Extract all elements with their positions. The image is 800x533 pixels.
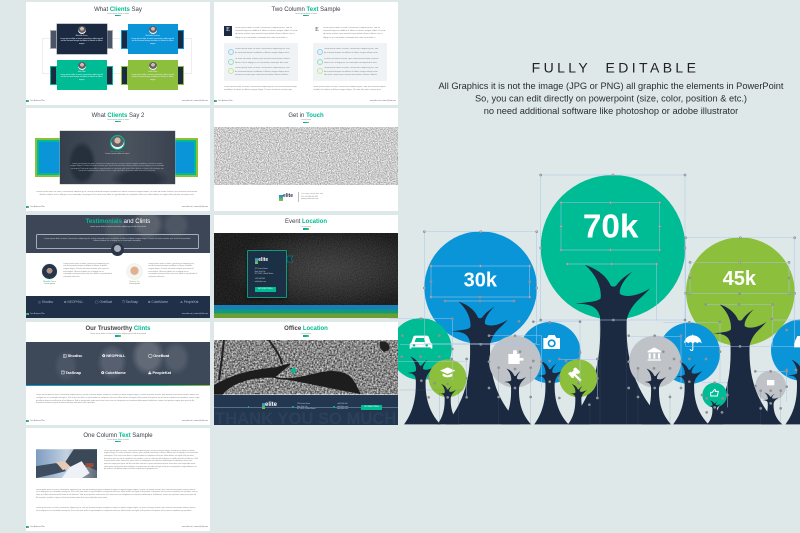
info band: 123 Lorem Street	[297, 403, 310, 405]
location callout: 123 Lorem Street	[255, 268, 268, 270]
description text: So, you can edit directly on powerpoint (size, color, position & etc.)	[475, 94, 747, 104]
tree trunks: large	[446, 265, 778, 424]
panel: office location: Lorem ipsum	[301, 333, 311, 335]
drop cap light: E	[315, 27, 319, 33]
footer	[26, 312, 208, 315]
info band: NY 10001, United States	[297, 408, 316, 410]
tree: blue camera	[519, 322, 581, 424]
title: Testimonials and Clints	[86, 219, 150, 225]
selection handles	[402, 175, 796, 412]
panel: event location: Lorem ipsum	[301, 226, 311, 228]
testimonial text left: Lorem ipsum dolor sit amet, consectetur adipiscing elit, sed do eiusmod tempor incididunt ut labore et dolore magna aliqua. Ut enim ad minim veniam, quis nostrud exercitation. Ullamco laboris nisi ut aliquip ex ea commodo consequat duis aute irure dolor in reprehenderit voluptate velit esse.	[63, 263, 112, 278]
card: blue	[128, 24, 178, 54]
info band: elite	[265, 402, 277, 408]
location callout: New York City	[255, 270, 265, 272]
description text: no need additional software like photoshop or adobe illustrator	[484, 106, 738, 116]
footer	[214, 100, 396, 102]
title: Get in Touch	[288, 113, 324, 119]
info band: www.elite.com	[337, 408, 348, 410]
portrait	[110, 135, 125, 150]
tree: lime gavel	[559, 359, 597, 424]
card: lime: Laura Rose	[148, 71, 157, 73]
description text: All Graphics it is not the image (JPG or PNG) all graphic the elements in PowerPoint	[439, 81, 784, 91]
footer	[26, 526, 208, 528]
client logo band: ✿ NEOPHILL	[64, 300, 83, 304]
heading: fully editable: FULLY EDITABLE	[532, 60, 699, 76]
card: dark: Lorem ipsum dolor sit amet consectetur adipiscing elit sed do eiusmod tempor incididunt ut labore et dolore magna	[60, 38, 103, 45]
logos photo panel: ✿ NEOPHILL	[102, 354, 125, 358]
tree: 30k: 30k	[464, 270, 498, 292]
title: Two Column Text Sample	[272, 7, 340, 13]
tree: grey puzzle	[489, 336, 541, 424]
card: lime: Lorem ipsum dolor sit amet consectetur adipiscing elit sed do eiusmod tempor incididunt ut labore et dolore magna	[131, 74, 174, 81]
card: dark: Michelle Grace	[76, 35, 88, 37]
title: One Column Text Sample	[83, 433, 153, 439]
logos photo panel: ◫ Shodisc	[63, 354, 82, 358]
drop cap dark	[224, 26, 232, 36]
footer: www.elite.com | contact@elite.com	[182, 100, 208, 102]
panel: one column text sample: Lorem ipsum dolor sit amet	[107, 438, 129, 440]
contact text: Tel: +00 000 000 000	[301, 196, 318, 198]
panel: two column text sample: Lorem ipsum dolor sit amet	[295, 12, 317, 14]
drop cap dark: E	[226, 27, 230, 33]
person left	[42, 264, 58, 285]
client logo band	[26, 296, 210, 318]
info band: +000 000 000	[337, 403, 347, 405]
location pin	[290, 368, 296, 373]
badge	[111, 243, 124, 256]
person right	[126, 264, 142, 285]
logos photo panel: ✿ CubeMome	[101, 371, 126, 375]
tree: lime graduation cap	[429, 359, 467, 424]
colour bands	[214, 305, 398, 318]
list panel right	[313, 43, 387, 81]
title: Event Location	[285, 219, 327, 225]
tree: green car	[390, 318, 452, 424]
photo quote panel: Lorem ipsum dolor sit amet, consectetur adipiscing elit, sed do eiusmod tempor incididunt ut labore et dolore magna aliqua. Ut enim ad minim veniam, quis nostrud exercitation ullamco laboris nisi ut aliquip ex ea commodo consequat. Duis aute irure dolor in reprehenderit in voluptate velit esse cillum dolore eu fugiat nulla pariatur sint occaecat cupidatat non proident sunt in culpa qui officia deserunt mollit anim id est laborum.	[70, 163, 164, 172]
panel: what clients say 2	[26, 108, 210, 211]
testimonial text right: Lorem ipsum dolor sit amet, consectetur adipiscing elit, sed do eiusmod tempor incididunt ut labore et dolore magna aliqua. Ut enim ad minim veniam, quis nostrud exercitation. Ullamco laboris nisi ut aliquip ex ea commodo consequat duis aute irure dolor in reprehenderit voluptate velit esse.	[148, 263, 197, 278]
body text: Lorem ipsum dolor sit amet, consectetur adipiscing elit, sed do eiusmod tempor incididunt ut labore et dolore magna aliqua. Ut enim ad minim veniam, quis nostrud exercitation ullamco laboris nisi ut aliquip ex ea commodo consequat. Duis aute irure dolor in reprehenderit in voluptate velit esse cillum dolore eu fugiat nulla pariatur. Excepteur sint occaecat cupidatat non proident, sunt in culpa qui officia deserunt mollit anim id est laborum. Sed ut perspiciatis unde omnis iste natus error sit voluptatem accusantium doloremque laudantium, totam rem aperiam eaque ipsa quae ab illo inventore veritatis et quasi architecto beatae vitae dicta sunt explicabo.	[36, 394, 200, 404]
contact text	[301, 193, 323, 200]
full-width text two: Lorem ipsum dolor sit amet, consectetur adipiscing elit, sed do eiusmod tempor incididunt ut labore et dolore magna aliqua. Ut enim ad minim veniam, quis nostrud exercitation ullamco laboris nisi ut aliquip ex ea commodo consequat. Duis aute irure dolor in reprehenderit in voluptate velit esse cillum dolore eu fugiat nulla pariatur. Excepteur sint occaecat cupidatat non proident.	[36, 507, 195, 512]
card: green	[57, 60, 107, 90]
map	[214, 127, 398, 185]
tree: blue umbrella	[659, 323, 720, 424]
title: Office Location	[284, 326, 328, 332]
client logo band: ❐ TaxSnap	[122, 300, 138, 304]
location callout: +000 000 000	[255, 278, 265, 280]
tree: 45k	[686, 237, 795, 346]
title: What Clients Say	[94, 7, 142, 13]
card side tabs	[50, 30, 184, 85]
panel: what clients say 2: Lorem ipsum dolor sit amet	[107, 118, 129, 120]
description text	[439, 81, 784, 116]
side text: Lorem ipsum dolor sit amet, consectetur adipiscing elit, sed do eiusmod tempor incididunt ut labore et dolore magna aliqua. Ut enim ad minim veniam, quis nostrud exercitation ullamco laboris nisi ut aliquip ex ea commodo consequat. Duis aute irure dolor in reprehenderit in voluptate velit esse cillum dolore eu fugiat nulla pariatur. Excepteur sint occaecat cupidatat non proident, sunt in culpa qui officia deserunt mollit anim id est laborum. Sed ut perspiciatis unde omnis iste natus error sit voluptatem accusantium doloremque laudantium, totam rem aperiam eaque ipsa quae ab illo inventore veritatis et quasi architecto beatae vitae dicta sunt explicabo nemo enim ipsam voluptatem quia voluptas sit aspernatur aut odit aut fugit sed quia consequuntur magni dolores eos qui ratione voluptatem sequi nesciunt neque porro quisquam est.	[104, 450, 198, 470]
panel: testimonials and clients	[26, 215, 210, 318]
handshake photo	[36, 449, 97, 478]
client logo band: ◯ OneBoat	[95, 300, 112, 304]
footer: www.elite.com | contact@elite.com	[182, 313, 208, 315]
person left: Lorem ipsum	[44, 283, 55, 285]
title: What Clients Say 2	[92, 113, 144, 119]
client logo band: ⟁ PeopleKat	[180, 300, 198, 304]
location callout: NY 10001, United States	[255, 273, 273, 275]
location callout	[247, 250, 287, 298]
contact text: 123 Lorem Street New York	[301, 193, 323, 195]
panel: what clients say: Lorem ipsum dolor sit amet	[107, 12, 129, 14]
footer: Your Business Plan	[30, 313, 45, 315]
contact text: www.yourdomain.com	[301, 198, 319, 200]
logos photo panel	[26, 342, 210, 386]
tree: grey bank	[629, 336, 681, 424]
quote box	[36, 234, 199, 249]
footer: Your Business Plan	[30, 420, 45, 422]
photo quote panel: Michelle Grace	[111, 151, 124, 153]
info band: New York City	[297, 406, 308, 408]
coloured frame	[35, 138, 198, 177]
quote box: Lorem ipsum dolor sit amet, consectetur adipiscing elit, sed do eiusmod tempor incididunt ut labore et dolore magna aliqua. Ut enim ad minim veniam, quis nostrud exercitation ullamco laboris nisi ut aliquip ex ea commodo consequat.	[44, 238, 191, 242]
dark map	[214, 233, 398, 305]
card: dark	[57, 24, 107, 54]
tree: 30k	[424, 231, 537, 344]
tree: 70k	[541, 175, 685, 320]
person right: Lorem ipsum	[129, 283, 140, 285]
info band: GET DIRECTIONS ▸	[364, 407, 379, 408]
card: blue: Lorem ipsum dolor sit amet consectetur adipiscing elit sed do eiusmod tempor incididunt ut labore et dolore magna	[131, 38, 174, 45]
panel: event location	[214, 215, 398, 318]
tree: small green thumb	[702, 383, 727, 424]
footer: www.elite.com | contact@elite.com	[182, 206, 208, 208]
person left: Michelle Grace	[43, 280, 56, 282]
tree: small grey	[755, 371, 786, 424]
panel: our trustworthy clients: Lorem ipsum dolor sit amet consectetur adipiscing elit sed do eiusmod	[90, 333, 146, 335]
tree: blue right	[771, 319, 800, 424]
client logo band: ◫ Shodisc	[38, 300, 53, 304]
panel: two column text sample	[214, 2, 398, 105]
footer	[26, 420, 208, 422]
list panel left	[224, 43, 298, 81]
panel: get in touch: Lorem ipsum	[301, 118, 311, 120]
footer	[26, 206, 208, 208]
panel: testimonials and clients: Lorem ipsum dolor sit amet consectetur adipiscing elit sed do eiusmod	[90, 226, 146, 228]
info band: info@elite.com	[337, 406, 348, 408]
panel: one column text sample	[26, 428, 210, 531]
location callout: info@elite.com	[255, 280, 266, 282]
title: Our Trustworthy Clints	[85, 326, 150, 332]
footer: Your Business Plan	[218, 100, 233, 102]
location callout: elite	[258, 257, 268, 263]
panel: our trustworthy clients	[26, 322, 210, 425]
footer: www.elite.com | contact@elite.com	[370, 100, 396, 102]
logo: elite	[283, 193, 293, 199]
full-width text one: Lorem ipsum dolor sit amet, consectetur adipiscing elit, sed do eiusmod tempor incididunt ut labore et dolore magna aliqua. Ut enim ad minim veniam, quis nostrud exercitation ullamco laboris nisi ut aliquip ex ea commodo consequat. Duis aute irure dolor in reprehenderit in voluptate velit esse cillum dolore eu fugiat nulla pariatur. Excepteur sint occaecat cupidatat non proident, sunt in culpa qui officia deserunt mollit anim id est laborum. Sed ut perspiciatis unde omnis iste natus error sit voluptatem accusantium doloremque laudantium, totam rem aperiam eaque ipsa quae ab illo inventore veritatis et quasi architecto beatae vitae dicta sunt explicabo nemo enim.	[36, 489, 198, 499]
info band	[214, 395, 398, 425]
panel: what clients say	[26, 2, 210, 105]
card: green: Lorem ipsum dolor sit amet consectetur adipiscing elit sed do eiusmod tempor incididunt ut labore et dolore magna	[60, 74, 103, 81]
card: green: John Rise	[78, 71, 86, 73]
footer: Your Business Plan	[30, 526, 45, 528]
footer: Your Business Plan	[30, 206, 45, 208]
tree: 45k: 45k	[723, 268, 757, 290]
footer: www.elite.com | contact@elite.com	[182, 526, 208, 528]
tree: 70k: 70k	[583, 208, 639, 245]
logos photo panel: ❐ TaxSnap	[61, 371, 81, 375]
header photo	[26, 215, 210, 253]
location callout: GET DIRECTIONS ▸	[258, 288, 273, 290]
panel: get in touch	[214, 108, 398, 211]
panel: office location	[214, 322, 398, 425]
footer: www.elite.com | contact@elite.com	[182, 420, 208, 422]
logos photo panel: ◯ OneBoat	[148, 354, 169, 358]
person right: Melissa Jay	[130, 280, 139, 282]
card: lime	[128, 60, 178, 90]
card: blue: Michaela Jackson	[146, 35, 160, 37]
logos photo panel: ⟁ PeopleKat	[148, 371, 171, 375]
photo quote panel	[60, 131, 175, 184]
footer	[26, 100, 208, 102]
photo quote panel: Lorem ipsum dolor sit amet	[105, 153, 129, 155]
client logo band: ✿ CubeMome	[148, 300, 168, 304]
satellite map	[214, 340, 398, 395]
footer: Your Business Plan	[30, 100, 45, 102]
